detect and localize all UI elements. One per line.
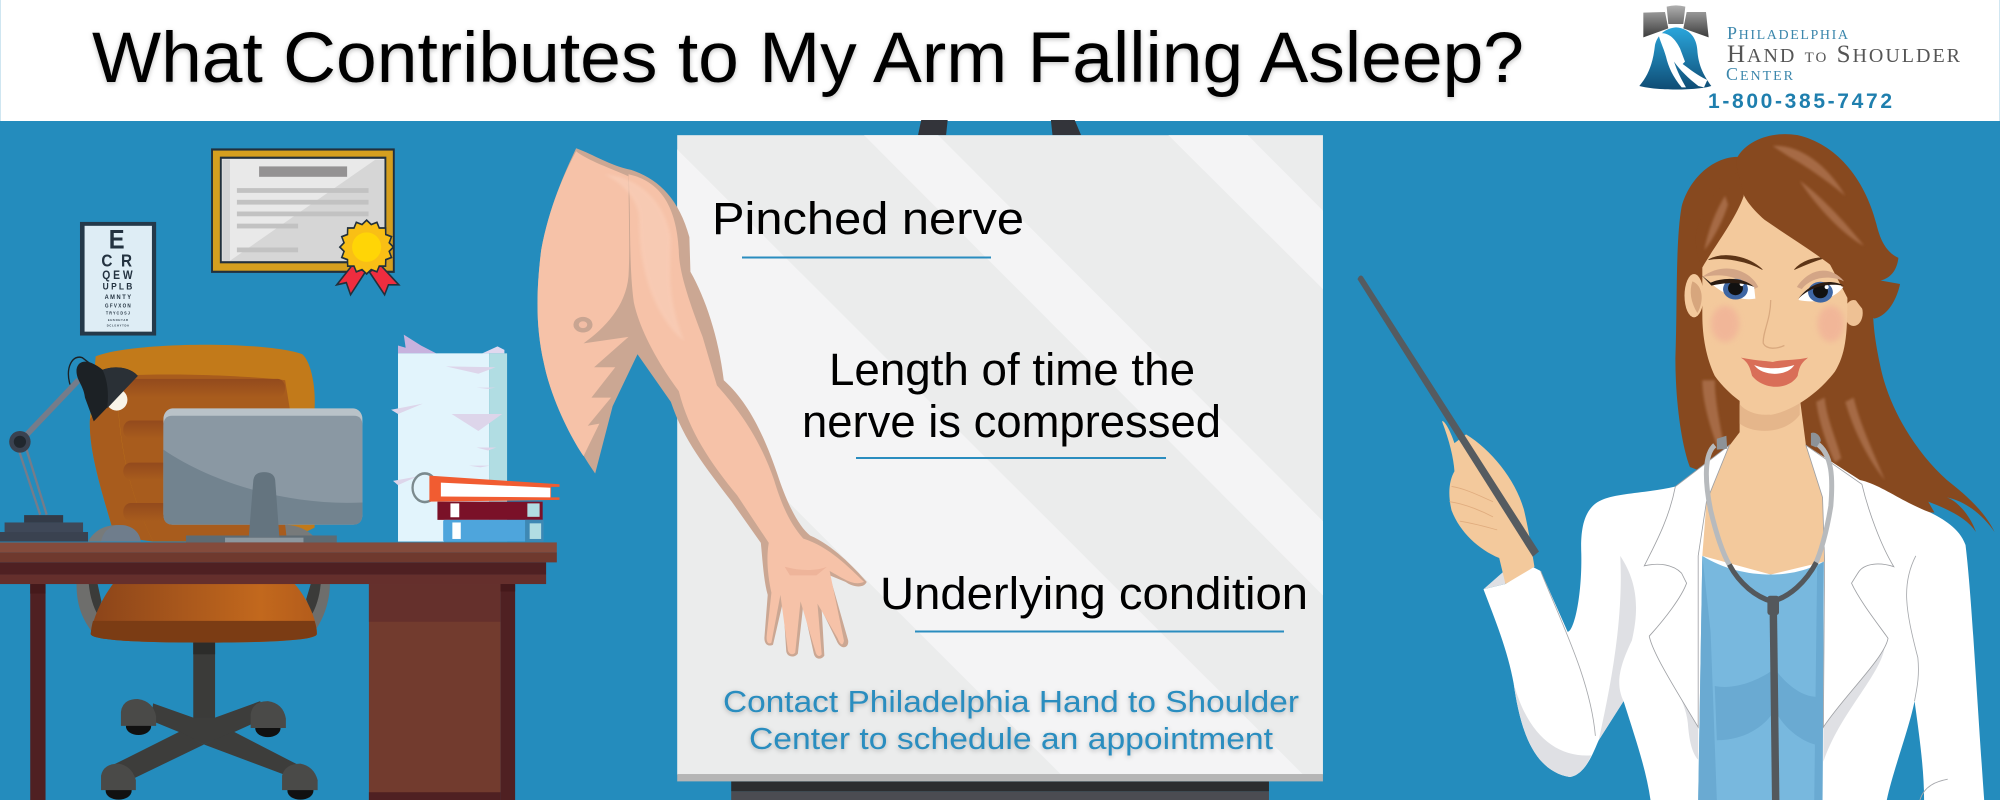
eye chart: E [109,225,125,255]
eye chart: G F V X O N [105,303,131,309]
eye chart: Q E W [102,270,133,282]
eye chart: D C L E H Y T D A [107,323,129,328]
hair back highlights [1702,380,1885,480]
coat shadows [1483,556,1885,777]
stacked binders and books [413,473,560,542]
office chair back [88,345,318,542]
board text: underlying condition: Underlying condition [880,568,1308,619]
title: What Contributes to My Arm Falling Asleep? [92,19,1524,98]
blush [1711,306,1844,342]
armpit nipple detail [573,317,593,333]
stack of papers [391,335,507,542]
hair front [1696,134,1900,319]
office scene [0,149,560,800]
chair base with wheels [101,643,318,800]
pointer stick [1357,276,1539,557]
icon: liberty bell with arm [1639,5,1711,89]
desk [0,542,557,800]
eye chart: U P L B [103,281,133,292]
mouth [1741,358,1808,387]
logo name: Philadelphia: PHILADELPHIA [1727,23,1849,43]
eyes [1701,269,1844,303]
blue shirt [1698,556,1824,800]
logo phone number: 1-800-385-7472 [1708,90,1892,113]
coat [1483,445,1984,800]
coat lapels [1644,445,1894,727]
call to action [723,684,1299,756]
computer monitor [163,408,362,542]
ears [1685,274,1863,326]
eye chart: C R [101,252,132,271]
call to action: Contact Philadelphia Hand to Shoulder [723,684,1299,719]
chair seat and armrests [77,584,330,643]
board text: length of time: Length of time the [829,344,1195,395]
board text: length of time [802,344,1221,459]
eye chart: A M N T Y [105,294,131,301]
eye chart [80,222,156,336]
face [1702,194,1847,415]
certificate [212,149,399,295]
board text: length of time: nerve is compressed [802,396,1221,447]
coat seams [1541,556,1948,800]
logo [1639,5,1961,113]
eye chart: E H S O H T A R [108,318,128,322]
hand [1442,421,1534,584]
arm illustration [537,148,867,659]
neck and chest skin [1702,398,1825,575]
computer mouse [101,525,141,542]
hair back [1675,157,1995,532]
doctor illustration [1357,134,1995,800]
board text: pinched nerve: Pinched nerve [712,193,1024,244]
header band [0,0,2000,121]
eyebrows [1709,255,1825,270]
call to action: Center to schedule an appointment [749,721,1273,756]
logo name: Hand to Shoulder: HAND TO SHOULDER [1727,41,1961,68]
stethoscope [1706,433,1832,800]
logo name: Center: CENTER [1726,64,1794,84]
whiteboard with stand [677,120,1323,800]
nose [1763,300,1784,348]
icon: ribbon seal [337,220,399,295]
desk lamp [0,357,138,542]
eye chart: T R Y C D S J [106,310,130,316]
